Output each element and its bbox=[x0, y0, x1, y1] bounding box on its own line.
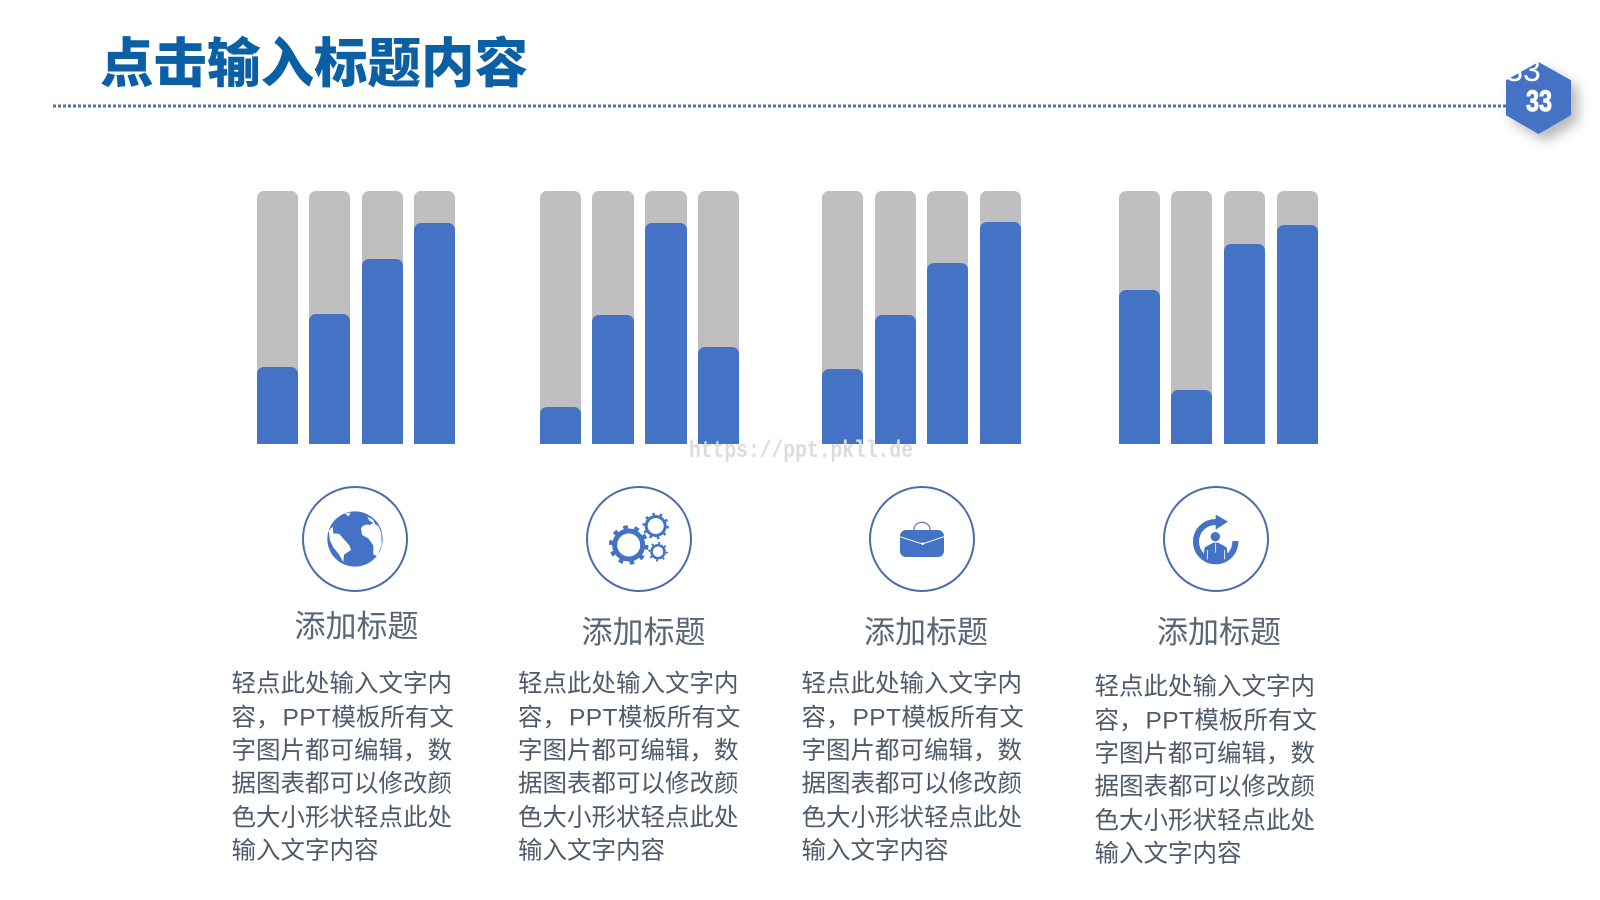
text block 2: 据图表都可以修改颜 bbox=[518, 770, 738, 798]
text block 4: 字图片都可编辑，数 bbox=[1094, 740, 1315, 768]
icon: briefcase bbox=[870, 487, 974, 591]
text block 2: 容，PPT模板所有文 bbox=[518, 704, 740, 732]
icon: globe bbox=[303, 487, 407, 591]
text block 3: 字图片都可编辑，数 bbox=[802, 736, 1022, 764]
icon: person refresh bbox=[1164, 487, 1268, 591]
heading 2: 添加标题 bbox=[582, 615, 706, 650]
text block 2: 输入文字内容 bbox=[518, 836, 665, 864]
title: 点击输入标题内容 bbox=[100, 21, 528, 98]
text block 4: 轻点此处输入文字内 bbox=[1094, 672, 1315, 700]
bar chart 3 bbox=[822, 191, 1021, 444]
bar chart 4 bbox=[1119, 191, 1318, 444]
page number badge: 33 bbox=[1505, 52, 1541, 88]
bar chart 1 bbox=[257, 191, 455, 444]
text block 3: 容，PPT模板所有文 bbox=[802, 704, 1024, 732]
text block 3: 色大小形状轻点此处 bbox=[802, 804, 1022, 832]
heading 3: 添加标题 bbox=[864, 615, 988, 650]
text block 3: 据图表都可以修改颜 bbox=[802, 770, 1022, 798]
text block 3: 轻点此处输入文字内 bbox=[802, 670, 1022, 698]
text block 1: 输入文字内容 bbox=[232, 836, 378, 864]
text block 4: 输入文字内容 bbox=[1094, 840, 1242, 868]
text block 4: 据图表都可以修改颜 bbox=[1094, 772, 1315, 800]
text block 2: 字图片都可编辑，数 bbox=[518, 736, 738, 764]
icon: gears bbox=[587, 487, 691, 591]
page number badge bbox=[1505, 52, 1570, 134]
text block 2: 轻点此处输入文字内 bbox=[518, 670, 738, 698]
bar chart 2 bbox=[540, 191, 739, 444]
heading 4: 添加标题 bbox=[1157, 615, 1281, 650]
text block 4: 容，PPT模板所有文 bbox=[1094, 708, 1317, 734]
text block 1: 轻点此处输入文字内 bbox=[232, 670, 452, 698]
text block 1: 据图表都可以修改颜 bbox=[232, 770, 452, 798]
page number badge: 33 bbox=[1526, 84, 1552, 118]
text block 4: 色大小形状轻点此处 bbox=[1094, 806, 1315, 834]
text block 1: 色大小形状轻点此处 bbox=[232, 804, 452, 832]
text block 2: 色大小形状轻点此处 bbox=[518, 804, 738, 832]
text block 1: 字图片都可编辑，数 bbox=[232, 736, 452, 764]
heading 1: 添加标题 bbox=[294, 609, 418, 644]
watermark: https://ppt.pkll.de bbox=[689, 438, 913, 465]
text block 1: 容，PPT模板所有文 bbox=[232, 704, 454, 732]
text block 3: 输入文字内容 bbox=[802, 836, 948, 864]
